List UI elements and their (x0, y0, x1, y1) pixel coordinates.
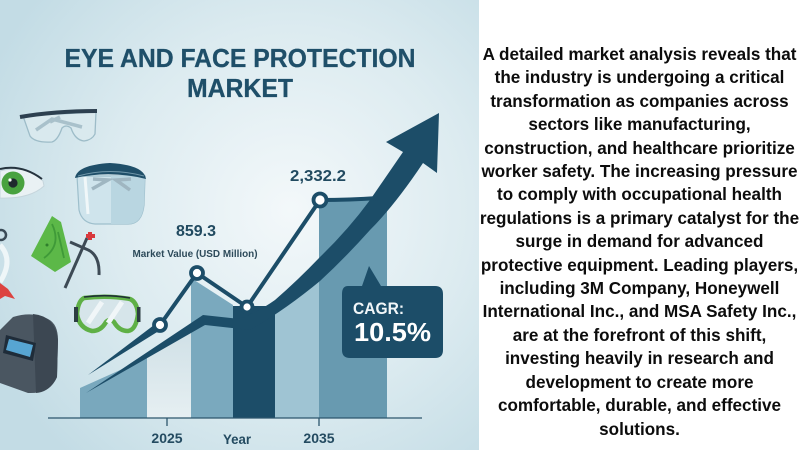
text block: market analysis: to comply with occupational health (497, 185, 782, 204)
text block: market analysis: regulations is a primary catalyst for the (480, 209, 799, 228)
axis title: market value: Market Value (USD Million) (132, 249, 258, 260)
text block: market analysis (480, 45, 799, 438)
icon: pick tool (65, 232, 99, 288)
icon: partial tool at left edge (0, 230, 15, 299)
axis labels (151, 430, 335, 447)
icon: welding helmet (0, 314, 58, 393)
callout: CAGR: 10.5% (354, 317, 431, 347)
axis labels: 2035 (303, 430, 335, 446)
text block: market analysis: A detailed market analysis reveals that (483, 45, 796, 64)
text block: market analysis: worker safety. The increasing pressure (481, 162, 798, 181)
text block: market analysis: comfortable, durable, and effective (498, 396, 781, 415)
bar chart (48, 200, 422, 426)
axis labels: Year (223, 431, 252, 447)
title: EYE AND FACE PROTECTION (64, 43, 416, 73)
icon: safety glasses (20, 111, 97, 142)
text block: market analysis: investing heavily in research and (505, 349, 774, 368)
text block: market analysis: including 3M Company, Honeywell (500, 279, 779, 298)
growth arrow (86, 113, 439, 393)
callout: CAGR (342, 266, 443, 358)
value label: 2035: 2,332.2 (290, 168, 346, 185)
text block: market analysis: surge in demand for advanced (516, 232, 763, 251)
text block: market analysis: International Inc., and MSA Safety Inc., (483, 302, 796, 321)
text block: market analysis: solutions. (599, 420, 680, 438)
text block: market analysis: the industry is undergoing a critical (495, 68, 784, 87)
icon: green respirator piece (31, 216, 71, 272)
trend line with markers (88, 194, 378, 375)
text block: market analysis: transformation as companies across (490, 92, 789, 111)
axis labels: 2025 (151, 430, 183, 446)
text block: market analysis: construction, and healthcare prioritize (484, 139, 795, 158)
callout: CAGR: CAGR: (353, 299, 404, 318)
text block: market analysis: development to create more (526, 373, 754, 392)
infographic panel (0, 0, 479, 450)
icon: green goggles (74, 296, 140, 331)
value label: 2025: 859.3 (176, 223, 216, 240)
text block: market analysis: sectors like manufacturing, (528, 115, 751, 134)
icon: face shield (75, 163, 146, 224)
chart axis (48, 418, 422, 426)
text block: market analysis: are at the forefront of this shift, (513, 326, 766, 345)
title (64, 43, 416, 103)
title: MARKET (187, 73, 293, 103)
icon: eye (0, 168, 44, 198)
text block: market analysis: protective equipment. Leading players, (481, 256, 798, 275)
